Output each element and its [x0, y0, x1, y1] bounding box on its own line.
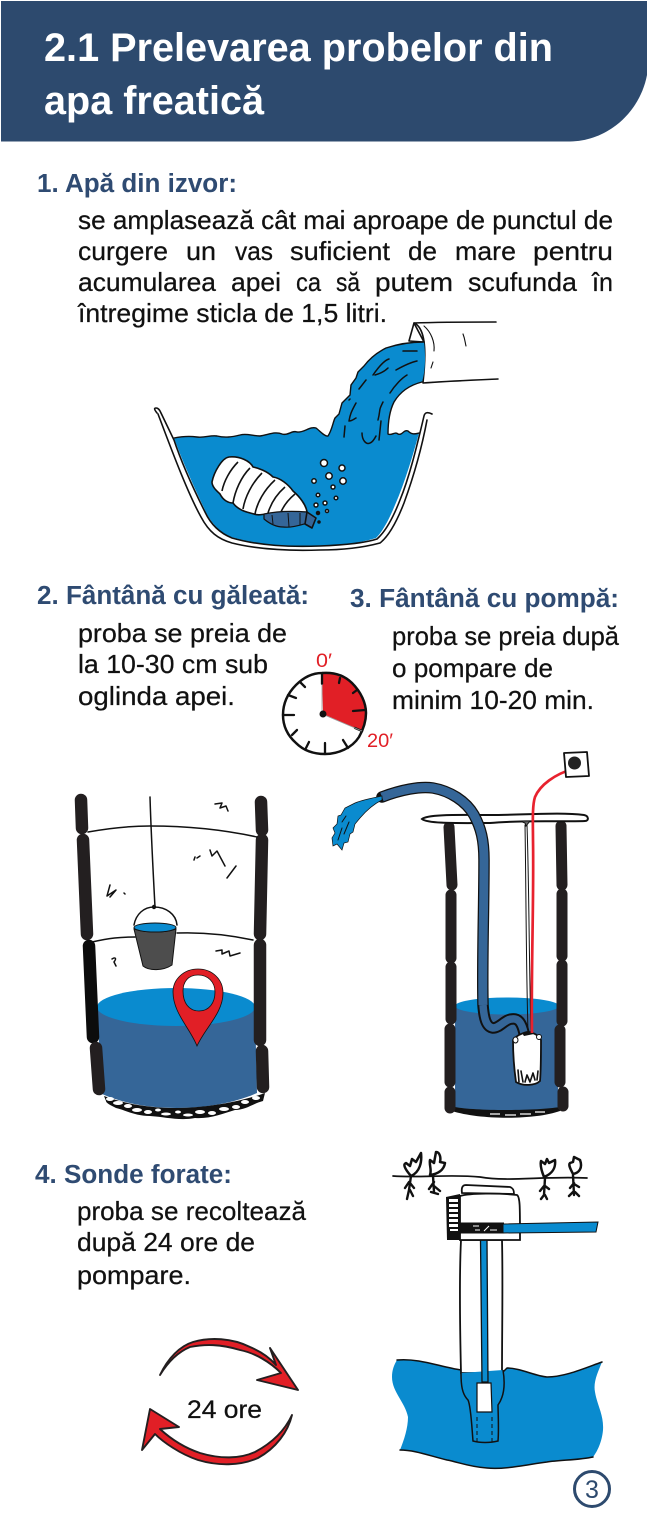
well cover	[422, 814, 588, 823]
page number badge: 3	[585, 1476, 599, 1504]
icon: stopwatch 0 to 20 minutes	[283, 651, 393, 754]
text block: section 1: în	[591, 267, 613, 297]
submersible pump	[477, 1383, 492, 1412]
pump well walls	[449, 826, 563, 1108]
text block: section 1: curgere	[78, 236, 168, 266]
heading: section 2: 2. Fântână cu găleată:	[37, 582, 309, 610]
arrow: top	[160, 1339, 298, 1390]
text block: section 1: scufunda	[468, 267, 578, 297]
text block: section 1: apei	[231, 267, 281, 297]
text block: section 1: mare	[455, 236, 516, 266]
red power cable	[532, 769, 573, 1033]
outlet pipe	[503, 1222, 598, 1233]
label: 24 ore: 24 ore	[187, 1396, 262, 1424]
heading: section 4: 4. Sonde forate:	[35, 1161, 232, 1189]
casing	[460, 1240, 502, 1373]
text block: section 2: la 10-30 cm sub	[78, 649, 268, 679]
borehole bottom	[461, 1370, 504, 1442]
text block: section 1: se amplasează cât mai aproape de punctul de	[78, 205, 613, 235]
page number badge	[574, 1472, 610, 1506]
text block: section 2: oglinda apei.	[78, 681, 235, 711]
illustration: drilled borehole	[392, 1152, 603, 1468]
icon: location pin	[173, 969, 223, 1046]
water spray	[332, 796, 382, 850]
text block: section 3: o pompare de	[392, 653, 553, 683]
title: apa freatică	[44, 79, 265, 123]
basin rim	[155, 408, 432, 546]
pump	[513, 1031, 542, 1085]
heading: section 1: 1. Apă din izvor:	[37, 170, 237, 198]
text block: section 1: suficient	[290, 236, 391, 266]
text block: section 4	[77, 1196, 307, 1290]
suspension cable	[525, 825, 531, 1033]
text block: section 1: un	[186, 236, 216, 266]
text block: section 1: ca	[296, 267, 321, 297]
water strokes	[344, 351, 417, 443]
label: 20 minutes: 20′	[367, 731, 393, 752]
text block: section 1	[77, 205, 613, 328]
text block: section 4: proba se recoltează	[77, 1196, 307, 1226]
text block: section 4: după 24 ore de	[77, 1227, 255, 1257]
wall socket	[564, 752, 589, 777]
text block: section 4: pompare.	[77, 1260, 191, 1290]
text block: section 1: vas	[235, 236, 273, 266]
well walls	[81, 800, 263, 1089]
icon: circular arrows 24 hours	[142, 1339, 298, 1464]
pump well water	[452, 998, 560, 1118]
inner pipe	[480, 1240, 488, 1382]
illustration: well with bucket	[81, 797, 265, 1119]
hose	[382, 787, 524, 1033]
inner lines and scratches	[88, 803, 257, 966]
air bubbles	[312, 460, 346, 523]
illustration: well with pump	[332, 752, 589, 1118]
rope and bucket	[134, 797, 177, 970]
pipe	[409, 322, 498, 383]
text block: section 3: minim 10-20 min.	[392, 685, 594, 715]
text block: section 1: acumularea	[78, 267, 217, 297]
text block: section 1: întregime sticla de 1,5 litri.	[77, 298, 387, 328]
aquifer	[392, 1360, 603, 1468]
heading: section 3: 3. Fântână cu pompă:	[350, 585, 619, 613]
text block: section 1: de	[408, 236, 437, 266]
title: 2.1 Prelevarea probelor din	[44, 26, 553, 70]
arrow: bottom	[142, 1409, 292, 1464]
well water	[97, 988, 257, 1108]
text block: section 1: să	[336, 267, 360, 297]
text block: section 3: proba se preia după	[392, 621, 620, 651]
title	[44, 26, 553, 123]
header banner	[1, 1, 647, 142]
label: 0 minutes: 0′	[316, 651, 332, 672]
text block: section 1: pentru	[533, 236, 613, 266]
text block: section 2: proba se preia de	[78, 618, 287, 648]
illustration: basin filling from pipe	[155, 322, 498, 550]
wellhead	[446, 1185, 520, 1240]
text block: section 1: putem	[375, 267, 453, 297]
text block: section 2	[78, 618, 287, 711]
bottle	[212, 457, 316, 528]
gravel	[104, 1093, 265, 1119]
text block: section 3	[392, 621, 620, 715]
water in basin and stream	[174, 342, 425, 546]
ground line and plants	[393, 1152, 587, 1199]
